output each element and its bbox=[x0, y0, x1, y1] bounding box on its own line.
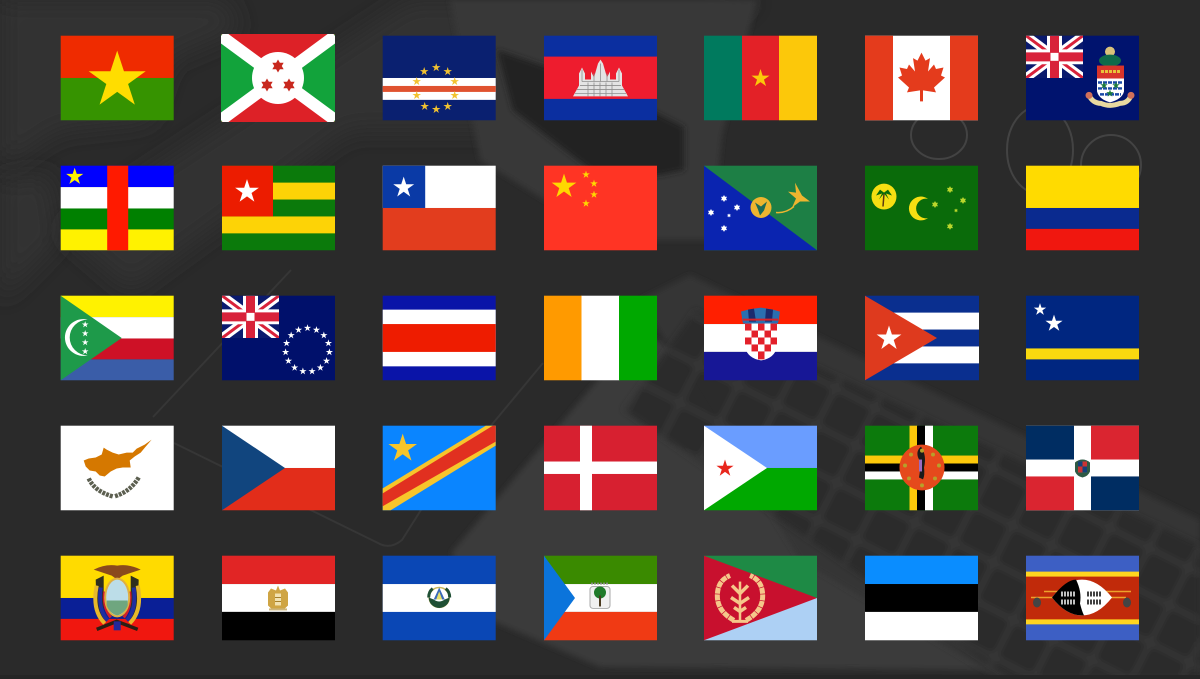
emblem bbox=[1075, 460, 1090, 477]
ring of stars bbox=[412, 63, 459, 113]
flag: Cayman Islands bbox=[1026, 36, 1139, 120]
flag: Denmark bbox=[544, 426, 657, 510]
flag: Croatia bbox=[704, 296, 817, 380]
flag: Ecuador bbox=[61, 556, 174, 640]
flag: Comoros bbox=[61, 296, 174, 380]
flag: Cameroon bbox=[704, 36, 817, 120]
flag: Togo bbox=[222, 166, 335, 250]
flag: Central African Republic bbox=[61, 166, 174, 250]
flag: Colombia bbox=[1026, 166, 1139, 250]
coat of arms bbox=[590, 584, 610, 608]
flag: Cocos Islands bbox=[865, 166, 978, 250]
flag: Cambodia bbox=[544, 36, 657, 120]
island silhouette bbox=[84, 440, 152, 476]
flag: El Salvador bbox=[383, 556, 496, 640]
coat of arms bbox=[1086, 47, 1134, 105]
olive wreath bbox=[717, 576, 763, 621]
flag: Eswatini bbox=[1026, 556, 1139, 640]
coat of arms bbox=[94, 565, 141, 630]
flag: Cape Verde bbox=[383, 36, 496, 120]
flag: Eritrea bbox=[704, 556, 817, 640]
flag: Curacao bbox=[1026, 296, 1139, 380]
flag: Dominican Republic bbox=[1026, 426, 1139, 510]
flag: Djibouti bbox=[704, 426, 817, 510]
red disc with parrot bbox=[900, 445, 944, 490]
maple leaf bbox=[898, 53, 945, 101]
coat of arms bbox=[741, 308, 780, 360]
nguni shield bbox=[1052, 580, 1112, 615]
flag: Chile bbox=[383, 166, 496, 250]
eagle of Saladin bbox=[268, 586, 288, 610]
golden bosun bird bbox=[776, 183, 810, 213]
flag: Burkina Faso bbox=[61, 36, 174, 120]
emblem bbox=[429, 588, 450, 608]
ring of 15 stars bbox=[282, 324, 333, 374]
flag: Equatorial Guinea bbox=[544, 556, 657, 640]
flag: Cuba bbox=[865, 296, 979, 380]
crescent bbox=[909, 197, 928, 220]
flag: Cyprus bbox=[61, 426, 174, 510]
spears and tassels bbox=[1031, 592, 1131, 597]
flag: Christmas Island bbox=[704, 166, 817, 250]
Angkor Wat temple bbox=[573, 60, 628, 96]
flag: Canada bbox=[865, 36, 978, 120]
flag: Burundi bbox=[221, 34, 335, 122]
crescent and stars bbox=[65, 319, 88, 356]
flag: Egypt bbox=[222, 556, 335, 640]
flag: China bbox=[544, 166, 657, 250]
southern cross bbox=[708, 195, 740, 232]
flag: Cook Islands bbox=[222, 296, 335, 380]
flag: DR Congo bbox=[383, 426, 496, 510]
flag: Dominica bbox=[865, 426, 978, 510]
olive branches bbox=[89, 477, 139, 496]
flag: Cote d'Ivoire bbox=[544, 296, 657, 380]
flag: Costa Rica bbox=[383, 296, 496, 380]
flag: Czech Republic bbox=[222, 426, 335, 510]
flag: Estonia bbox=[865, 556, 978, 640]
